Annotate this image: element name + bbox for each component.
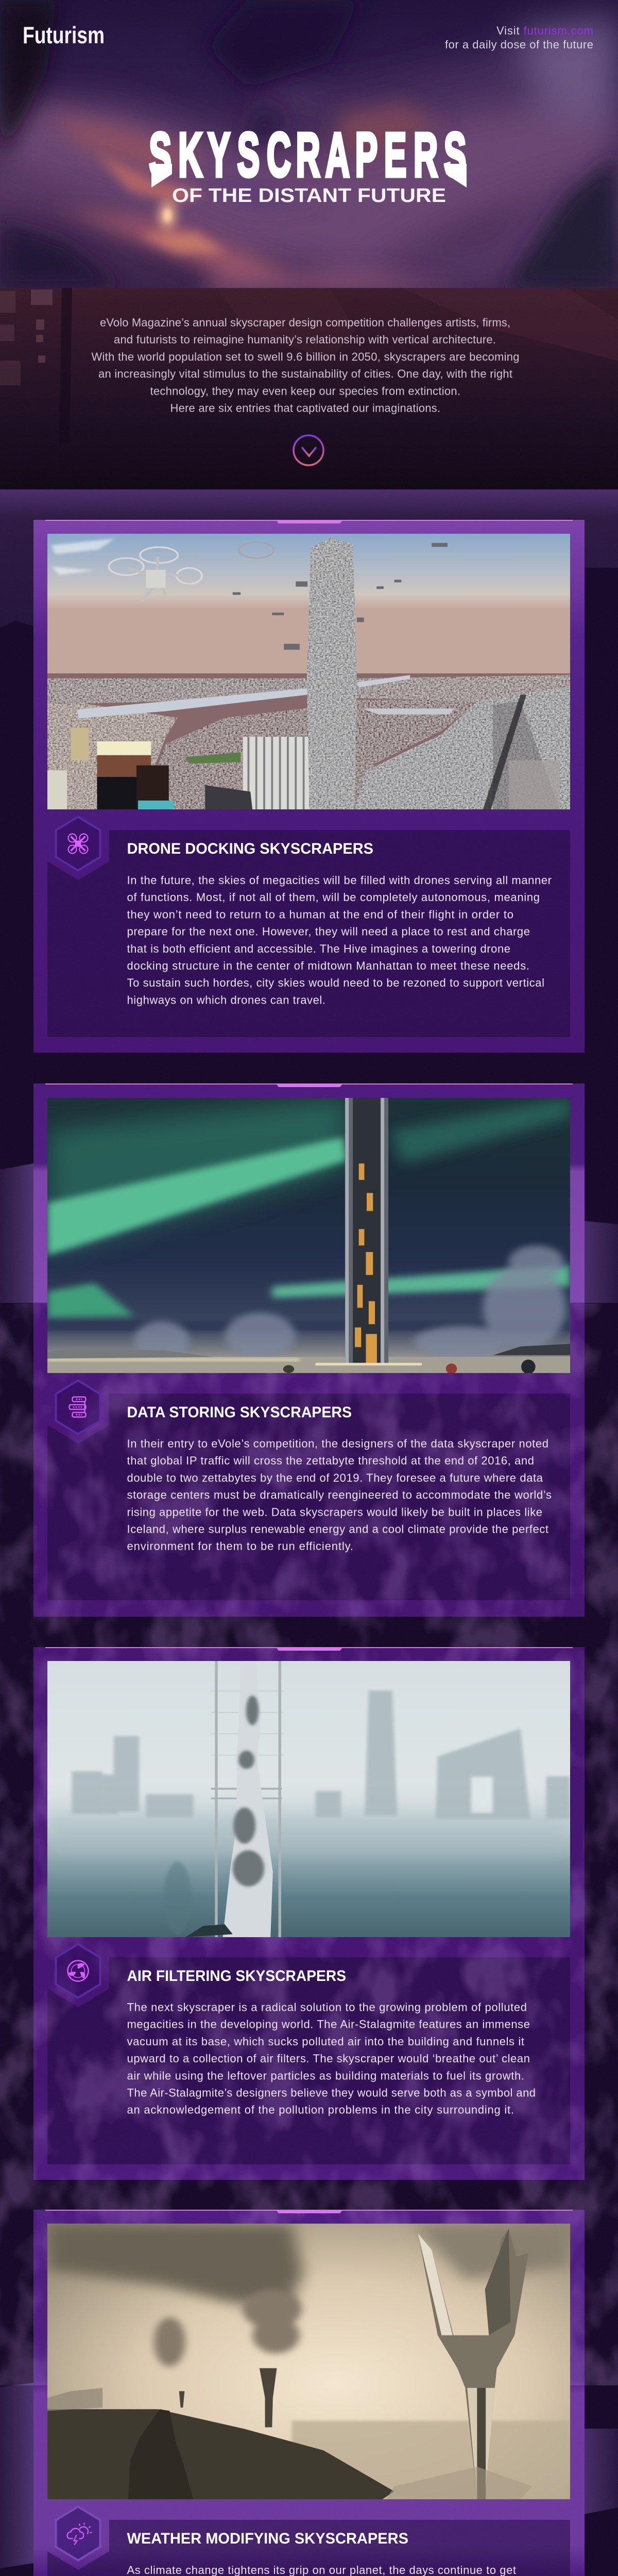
card 1 background [33, 520, 585, 1053]
card 3 body text: The next skyscraper is a radical solution to the growing problem of polluted [127, 2001, 527, 2013]
data tower [316, 1098, 422, 1365]
card 1 body text: To sustain such hordes, city skies would need to be rezoned to support vertical [127, 976, 544, 989]
filter tower frame [211, 1661, 284, 1937]
subtitle: OF THE DISTANT FUTURE [172, 185, 446, 207]
card 3 body text [127, 2001, 536, 2116]
striped tower [205, 737, 309, 809]
intro paragraph: Here are six entries that captivated our imaginations. [170, 402, 440, 414]
intro paragraph: an increasingly vital stimulus to the sustainability of cities. One day, with the right [98, 367, 512, 380]
card 1 body text: highways on which drones can travel. [127, 993, 325, 1006]
intro paragraph: eVolo Magazine’s annual skyscraper design competition challenges artists, firms, [100, 316, 510, 329]
card 3 body text: upward to a collection of air filters. The skyscraper would ‘breathe out’ clean [127, 2052, 530, 2065]
card 1 icon hexagon [56, 817, 100, 871]
stalagmite tower [185, 1664, 273, 1937]
top right visit note: Visit futurism.com [496, 24, 593, 37]
card 2 background [33, 1083, 585, 1617]
hero sky image [0, 0, 618, 299]
intro paragraph: and futurists to reimagine humanity’s relationship with vertical architecture. [114, 333, 496, 346]
card 2 heading: DATA STORING SKYSCRAPERS [127, 1404, 352, 1421]
intro paragraph: With the world population set to swell 9.6 billion in 2050, skyscrapers are becoming [92, 350, 519, 363]
card 3 body text: an acknowledgement of the pollution problems in the city surrounding it. [127, 2104, 514, 2116]
cloud craft tower [418, 2229, 528, 2499]
icon: down chevron [294, 435, 323, 465]
top right visit note [445, 24, 593, 51]
logo: Futurism: Futurism [23, 22, 105, 48]
city band behind intro [0, 288, 618, 489]
card 1 body text: docking structure in the center of midtown Manhattan to meet these needs. [127, 959, 529, 972]
icon: drone [68, 834, 88, 853]
card 2 body text: Iceland, where surplus renewable energy and a cool climate provide the perfect [127, 1523, 548, 1535]
card 3 body text: megacities in the developing world. The Air-Stalagmite features an immense [127, 2018, 530, 2031]
hooded figure [128, 2409, 193, 2499]
card 3 heading: AIR FILTERING SKYSCRAPERS [127, 1968, 346, 1985]
card 3 icon hexagon [56, 1944, 100, 1998]
distant towers [179, 2368, 277, 2427]
card 3 background [33, 1647, 585, 2180]
marble texture [0, 1303, 618, 2576]
white corner building [97, 741, 174, 809]
title: SKYSCRAPERS [149, 120, 466, 190]
card 3 body text: The Air-Stalagmite’s designers believe they would serve both as a symbol and [127, 2087, 536, 2099]
top right visit note: for a daily dose of the future [445, 38, 593, 51]
card 2 body text: double to two zettabytes by the end of 2019. They foresee a future where data [127, 1471, 543, 1484]
icon: servers [69, 1397, 85, 1417]
icon: fan [68, 1961, 89, 1981]
card 1 body text [127, 874, 552, 1006]
intro paragraph [92, 316, 519, 414]
hive tower [307, 538, 357, 809]
card 3 body text: vacuum at its base, which sucks polluted air into the building and funnels it [127, 2035, 524, 2048]
image: cloud craft tower in sepia landscape [47, 2224, 570, 2499]
card top accents [45, 520, 573, 2576]
card 2 body text [127, 1437, 552, 1553]
card 2 body text: rising appetite for the web. Data skyscrapers would likely be built in places like [127, 1505, 542, 1518]
card 1 body text: of functions. Most, if not all of them, will be completely autonomous, meaning [127, 891, 540, 904]
card 1 body text: In the future, the skies of megacities will be filled with drones serving all manner [127, 874, 552, 887]
card 1 body text: that is both efficient and accessible. The Hive imagines a towering drone [127, 942, 510, 955]
intro paragraph: technology, they may even keep our species from extinction. [150, 384, 460, 397]
icon: weather [67, 2522, 92, 2545]
image: air filtering tower in smog [47, 1661, 570, 1937]
card 4 heading: WEATHER MODIFYING SKYSCRAPERS [127, 2530, 408, 2547]
card 1 body text: prepare for the next one. However, they will need a place to rest and charge [127, 925, 530, 938]
image: data tower under aurora [47, 1098, 570, 1373]
card 1 body text: they won’t need to return to a human at the end of their flight in order to [127, 908, 513, 921]
card 2 body text: environment for them to be run efficiently. [127, 1540, 353, 1553]
card 2 body text: that global IP traffic will cross the zettabyte threshold at the end of 2016, and [127, 1454, 534, 1467]
image: drone docking tower over Manhattan [47, 534, 570, 809]
card 4 icon hexagon [56, 2507, 100, 2561]
card 2 body text: storage centers must be dramatically reengineered to accommodate the world’s [127, 1488, 552, 1501]
card 4 background [33, 2210, 585, 2576]
card 2 icon hexagon [56, 1381, 100, 1434]
drones [109, 543, 273, 601]
card 2 body text: In their entry to eVole’s competition, the designers of the data skyscraper noted [127, 1437, 548, 1450]
card 1 heading: DRONE DOCKING SKYSCRAPERS [127, 840, 373, 857]
card 3 body text: air while using the leftover particles as building materials to fuel its growth. [127, 2069, 524, 2082]
